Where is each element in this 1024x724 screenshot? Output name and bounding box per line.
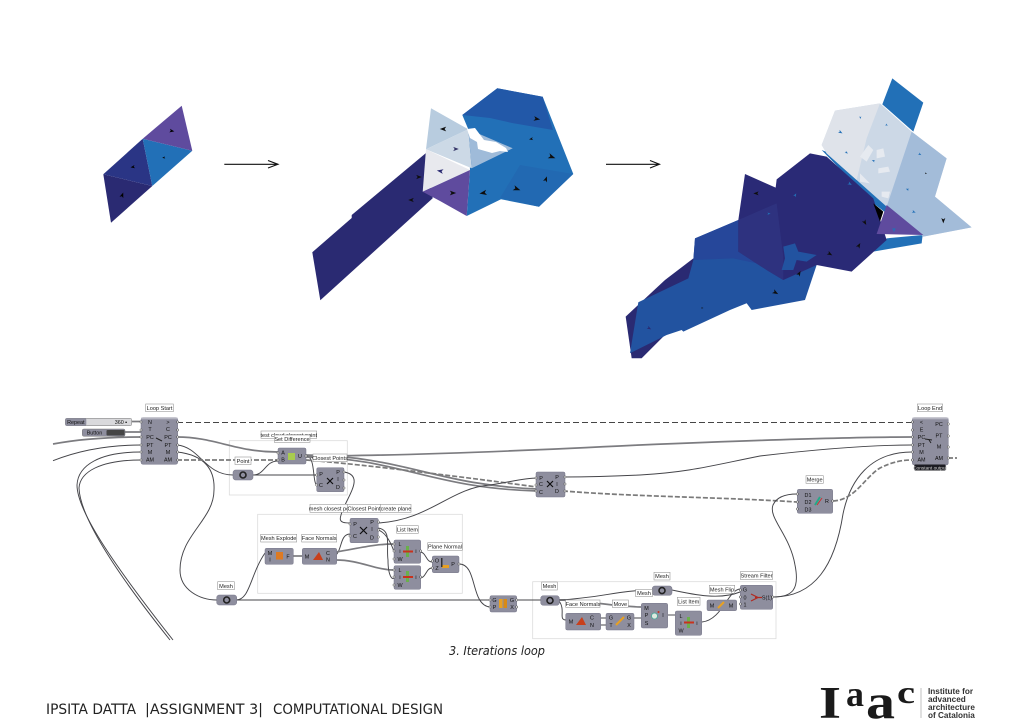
button: Button <box>87 431 102 437</box>
component: List Item lower: W <box>397 583 403 589</box>
component: List Item upper: i <box>399 549 401 555</box>
component: Closest Points: P <box>336 470 340 476</box>
component: Merge <box>797 476 833 514</box>
component: Closest Point: D <box>370 536 374 542</box>
component: Move: G <box>609 616 613 622</box>
component: List Item third <box>675 597 702 635</box>
component: List Item upper: W <box>397 557 403 563</box>
component: Closest Point: Closest Point <box>348 506 381 512</box>
component: Closest Point: P <box>370 520 374 526</box>
wires <box>53 422 957 640</box>
caption: 3. Iterations loop <box>449 643 545 658</box>
component: Closest Points <box>312 454 348 492</box>
component: Face Normals: M <box>305 554 310 560</box>
component: List Item upper: L <box>398 542 402 548</box>
component: Set Difference <box>261 431 318 464</box>
footer title: |ASSIGNMENT 3| <box>145 702 263 718</box>
component: Set Difference: Set Difference <box>274 437 310 443</box>
component: Mesh ray: I <box>662 613 664 619</box>
component: Plane Normal: Z <box>435 566 439 572</box>
component: Closest Point <box>309 504 411 543</box>
logo: IAAC: Institute for <box>928 687 974 696</box>
component: Closest Point: P <box>353 522 357 528</box>
component: Loop End: AM <box>935 456 944 462</box>
component: Closest Point: I <box>371 527 373 533</box>
component: Mesh ray <box>636 589 668 628</box>
component: Loop End: PT <box>936 434 943 440</box>
component: Plane Normal: Plane Normal <box>428 544 462 550</box>
logo: IAAC: of Catalonia <box>928 711 975 720</box>
component: List Item upper <box>394 526 421 563</box>
component: Loop Start: PT <box>147 443 154 449</box>
component: Orient: P <box>493 605 497 611</box>
component: Loop End: PC <box>935 422 943 428</box>
component: List Item lower <box>394 566 421 589</box>
component: Mesh ray: P <box>645 613 649 619</box>
component: List Item lower: L <box>398 568 402 574</box>
component: Loop Start: AM <box>164 458 173 464</box>
component: Loop Start: PC <box>164 435 172 441</box>
logo: IAAC: a <box>846 674 864 714</box>
component: List Item third: W <box>678 628 684 634</box>
component: Plane Normal: O <box>435 558 439 564</box>
component: Set Difference: test cloud closest point <box>261 433 318 439</box>
component: Mesh Explode: F <box>286 554 290 560</box>
component: Set Difference: B <box>281 458 285 464</box>
component: Orient: G <box>492 598 497 604</box>
component: Mesh Explode: I <box>269 558 271 564</box>
component: closest points middle: C <box>539 490 543 496</box>
node graph: iterations loop <box>53 404 957 640</box>
component: Loop End: PT <box>918 443 926 449</box>
slider: Repeat: 360 ▪ <box>115 420 127 426</box>
component: closest points middle: I <box>556 482 558 488</box>
component: Set Difference: U <box>298 454 302 460</box>
component: Face Normals second: N <box>590 623 594 629</box>
component: Loop End: Loop End <box>918 406 942 412</box>
component: Mesh ray: M <box>644 606 649 612</box>
component: Orient: G <box>510 598 514 604</box>
logo: IAAC: advanced <box>928 695 966 704</box>
component: closest points middle: P <box>539 476 543 482</box>
component: Loop End: M <box>937 444 942 450</box>
component: Face Normals <box>302 534 337 564</box>
mesh iteration 2 <box>312 88 573 300</box>
button <box>82 429 125 437</box>
component: Closest Point: create plane <box>381 506 411 512</box>
component: Mesh ray: S <box>645 621 649 627</box>
component: Mesh input: Mesh <box>219 584 233 590</box>
component: List Item upper: List Item <box>397 528 418 534</box>
component: Loop Start: M <box>166 450 171 456</box>
component: closest points middle: D <box>555 489 559 495</box>
component: Loop Start: C <box>166 427 170 433</box>
slider: Repeat <box>65 418 132 426</box>
component: Mesh third: Mesh <box>655 574 669 580</box>
component: Move: X <box>627 623 631 629</box>
component: closest points middle: P <box>555 475 559 481</box>
component: Point: Point <box>237 459 250 465</box>
component: Mesh input <box>217 582 237 605</box>
component: Face Normals: N <box>326 558 330 564</box>
arrow 1 <box>224 160 278 168</box>
component: Face Normals: Face Normals <box>302 536 337 542</box>
component: List Item third: i <box>680 621 682 627</box>
component: Mesh Explode: M <box>268 551 273 557</box>
component: List Item upper: i <box>415 549 417 555</box>
component: Move <box>606 600 634 630</box>
component: Loop End: PC <box>918 435 925 441</box>
footer title: COMPUTATIONAL DESIGN <box>273 702 443 718</box>
component: Mesh Explode <box>261 534 297 564</box>
component: Move: Move <box>613 602 627 608</box>
component: Mesh Flip: M <box>710 603 715 609</box>
component: Loop Start: PC <box>146 435 154 441</box>
component: Loop End <box>912 404 948 471</box>
component: Face Normals second: M <box>569 620 574 626</box>
mesh iteration 3 <box>626 78 972 358</box>
component: Move: T <box>609 623 613 629</box>
component: Loop End: M <box>919 450 924 456</box>
logo: IAAC: architecture <box>928 703 975 712</box>
mesh iteration 1 <box>103 106 192 223</box>
component: Loop Start: N <box>148 420 152 426</box>
component: Orient <box>490 596 517 612</box>
component: Plane Normal: P <box>451 562 455 568</box>
component: Point <box>233 457 253 480</box>
component: Loop End: AM <box>917 458 926 464</box>
component: Loop Start: Loop Start <box>147 406 173 412</box>
component: Merge: Merge <box>807 478 823 484</box>
component: List Item lower: i <box>399 575 401 581</box>
component: Loop End: < <box>920 420 923 426</box>
component: Closest Points: I <box>337 477 339 483</box>
component: Merge: D1 <box>805 493 811 499</box>
component: Mesh third <box>652 572 672 595</box>
component: List Item third: i <box>696 621 698 627</box>
component: Face Normals: C <box>326 551 330 557</box>
component: Face Normals second: C <box>590 616 594 622</box>
component: Stream Filter: Stream Filter <box>740 574 773 580</box>
component: Closest Points: P <box>319 472 323 478</box>
component: Loop Start: > <box>166 420 170 426</box>
logo: IAAC <box>819 674 975 724</box>
component: Orient: X <box>510 605 514 611</box>
component: List Item third: L <box>680 614 682 620</box>
component: Stream Filter: S(1) <box>762 596 772 602</box>
logo: IAAC: c <box>897 674 915 710</box>
footer title: IPSITA DATTA <box>46 702 137 718</box>
component: List Item third: List Item <box>678 599 700 605</box>
component: Loop Start: T <box>148 427 152 433</box>
component: Mesh Flip <box>707 585 737 611</box>
arrow 2 <box>606 160 660 168</box>
component: Mesh Flip: Mesh Flip <box>710 587 734 593</box>
component: Mesh Explode: Mesh Explode <box>261 536 296 542</box>
component: Face Normals second <box>566 600 601 630</box>
component: Loop Start: M <box>148 450 153 456</box>
slider: Repeat: Repeat <box>67 420 85 426</box>
component: List Item lower: i <box>415 575 417 581</box>
component: Mesh ray: Mesh <box>637 591 651 597</box>
footer title <box>46 702 443 718</box>
component: Closest Points: D <box>336 485 340 491</box>
component: Loop End: E <box>920 428 924 434</box>
component: Loop Start: AM <box>146 458 155 464</box>
component: Mesh Flip: M <box>729 603 734 609</box>
component: Loop Start <box>141 404 178 464</box>
component: Loop Start: PT <box>165 443 172 449</box>
component: Plane Normal <box>428 543 462 573</box>
component: Move: G <box>627 616 631 622</box>
group boxes <box>229 441 776 639</box>
component: Set Difference: A <box>281 450 285 456</box>
component: Closest Points: C <box>319 483 323 489</box>
wire ports <box>140 421 949 608</box>
component: Mesh second <box>541 582 559 605</box>
component: Merge: D3 <box>805 508 811 514</box>
component: Stream Filter <box>740 572 773 609</box>
component: closest points middle: C <box>539 482 543 488</box>
component: Stream Filter: 0 <box>744 596 746 602</box>
component: Face Normals second: Face Normals <box>566 602 601 608</box>
component: Closest Points: Closest Points <box>312 456 348 462</box>
component: Merge: R <box>825 499 829 505</box>
component: Stream Filter: 1 <box>744 602 746 608</box>
component: Closest Point: mesh closest po <box>309 506 349 512</box>
component: Loop End: Constant output <box>913 465 948 471</box>
component: Closest Point: C <box>353 534 357 540</box>
component: Mesh second: Mesh <box>543 584 556 590</box>
component: Merge: D2 <box>805 500 811 506</box>
component: closest points middle <box>536 472 565 497</box>
component: Stream Filter: G <box>743 588 747 594</box>
